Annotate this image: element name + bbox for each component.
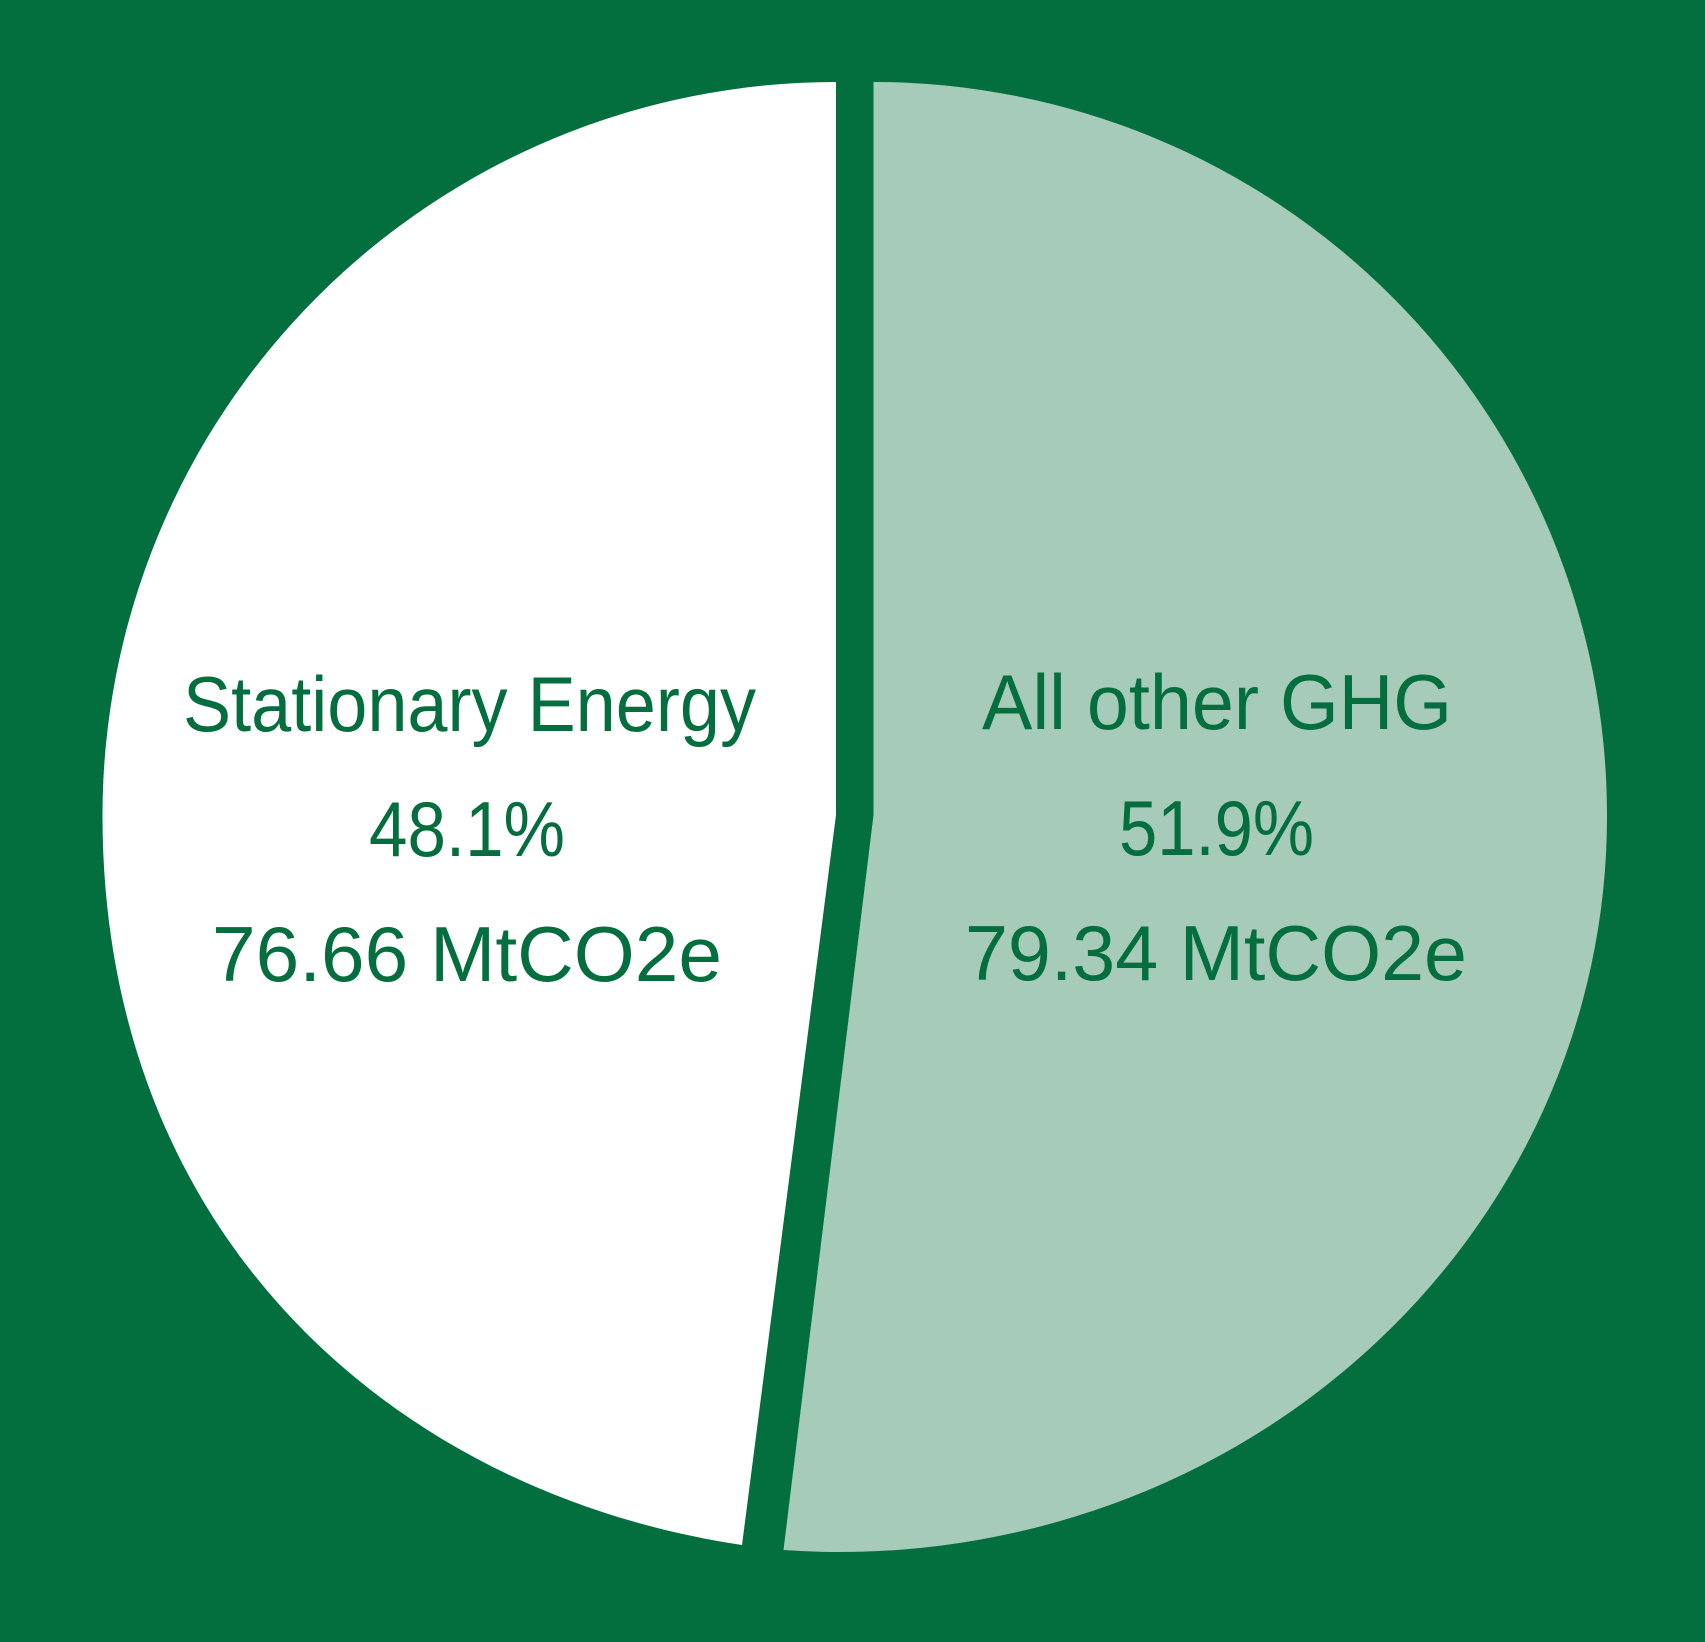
value: 48.1%: 48.1% — [369, 785, 565, 873]
slice: All other GHG — [784, 82, 1607, 1552]
value: 79.34 MtCO2e: 79.34 MtCO2e — [965, 909, 1467, 997]
value: 76.66 MtCO2e: 76.66 MtCO2e — [212, 910, 722, 998]
label: All other GHG: All other GHG — [982, 658, 1452, 746]
value: 51.9%: 51.9% — [1119, 784, 1314, 872]
slice: Stationary Energy — [102, 82, 836, 1545]
label: Stationary Energy: Stationary Energy — [183, 660, 756, 748]
